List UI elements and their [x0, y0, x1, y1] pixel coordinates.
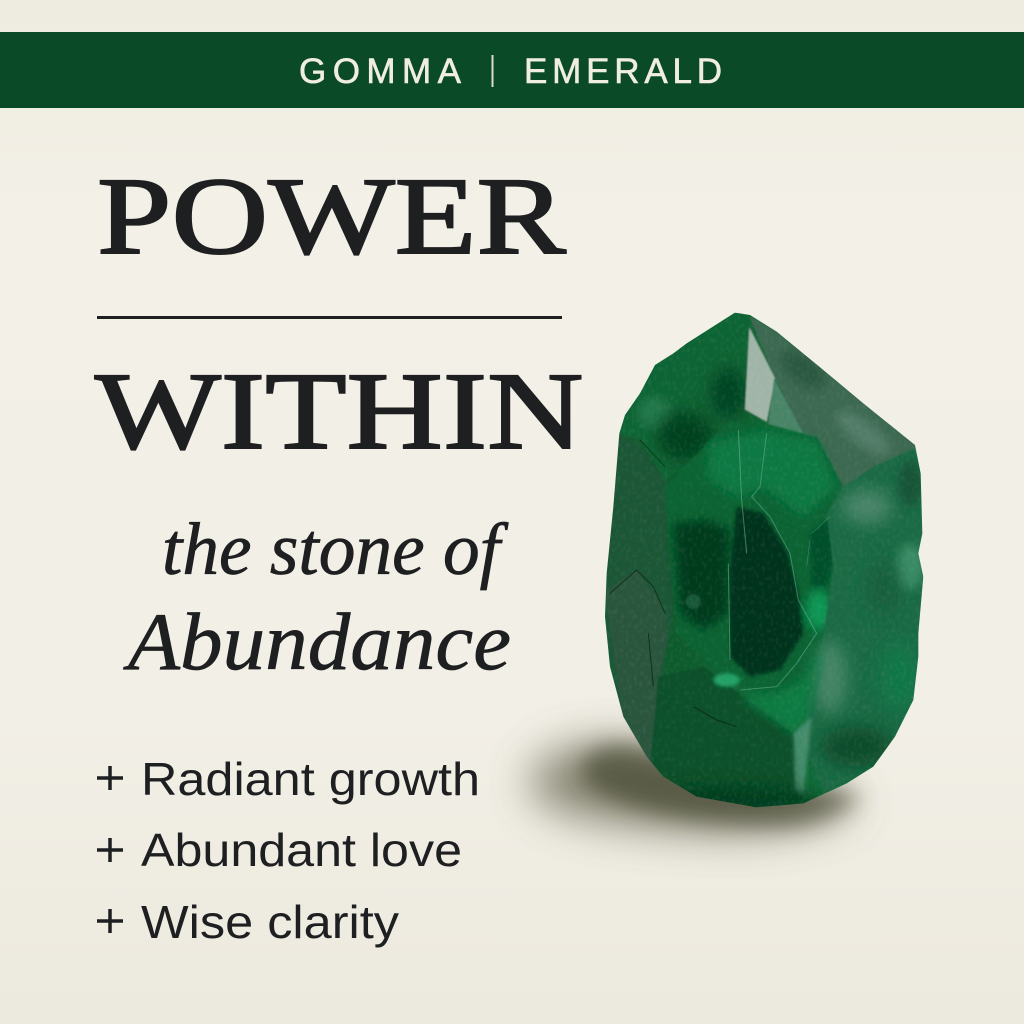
benefits list — [97, 753, 480, 948]
emerald gemstone — [605, 312, 924, 808]
benefit: abundant love: Abundant love — [141, 824, 462, 876]
gem cast shadow — [530, 743, 860, 832]
header banner — [0, 32, 1024, 108]
dark interior — [673, 520, 730, 630]
title divider — [97, 316, 562, 319]
fracture lines — [610, 430, 830, 727]
title: power: POWER — [97, 155, 566, 277]
header banner: EMERALD — [524, 52, 722, 91]
subtitle — [123, 509, 511, 687]
subtitle: Abundance — [123, 596, 511, 687]
subtitle: the stone of — [162, 509, 509, 591]
upper left facet — [619, 313, 748, 480]
light top facet — [745, 327, 775, 422]
right face — [803, 447, 923, 793]
title: within: WITHIN — [95, 351, 583, 472]
header text: brand: GOMMA — [299, 52, 462, 91]
benefit: wise clarity: Wise clarity — [141, 896, 399, 948]
surface grain — [606, 313, 922, 807]
left matte facet — [633, 451, 674, 676]
central face — [665, 420, 843, 700]
top right matte facet — [749, 316, 918, 487]
benefit: radiant growth: Radiant growth — [141, 753, 480, 805]
lower face — [650, 667, 803, 800]
